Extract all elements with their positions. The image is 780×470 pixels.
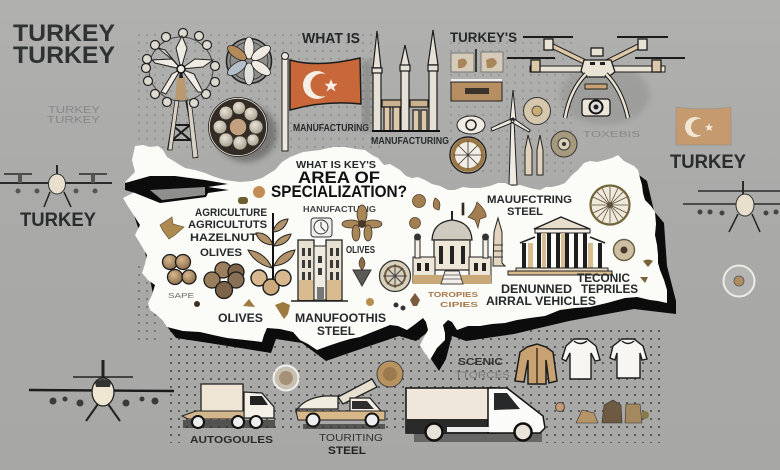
icon: windmill [142, 28, 220, 158]
icon: bowl of eggs [208, 98, 277, 162]
title: Turkey Turkey: TURKEY [13, 20, 115, 47]
text block: brown labels [428, 290, 478, 309]
heading: What is: WHAT IS [302, 31, 360, 47]
icon: large wheel [590, 186, 630, 224]
icon: small market figures [556, 400, 649, 423]
map of Turkey [123, 145, 676, 371]
icon: small Turkish flag [676, 107, 731, 145]
icon: compass wheel [450, 137, 486, 173]
label: manufacturing right: MANUFACTURING [371, 136, 449, 147]
label: olives lower: OLIVES [218, 311, 263, 325]
label: manufacturing steel right: MAUUFCTRING [487, 194, 572, 206]
icon: hazelnut trio left [162, 254, 196, 284]
icon: disc top [524, 98, 550, 124]
text block: agriculture list: OLIVES [200, 247, 242, 259]
icon: Turkish flag on pole [282, 52, 361, 151]
icon: jacket [515, 344, 557, 384]
text block: tectonic textiles vehicles [486, 273, 638, 308]
text block: tectonic textiles vehicles: TEPRILES [581, 284, 638, 296]
faint label: TOXEBIS [583, 130, 640, 139]
icons: small leaves lower [194, 298, 374, 319]
text block: agriculture list: AGRICULTUTS [188, 219, 267, 231]
icon: eye badge [457, 116, 485, 134]
icon: rosette medallion [225, 37, 273, 85]
label: scenic [455, 357, 510, 380]
text block: agriculture list: HAZELNUT [190, 232, 257, 244]
label: manufacturing left: MANUFACTURING [293, 123, 369, 134]
heading: map question [271, 159, 407, 201]
icon: olive plant [248, 213, 295, 295]
icon: tow truck [296, 379, 385, 429]
icon: obelisk [493, 218, 505, 266]
icon: small nut acorn [238, 186, 265, 204]
label: Turkey right: TURKEY [670, 152, 746, 173]
icon: truck one [182, 384, 275, 428]
label: manufacturing small: HANUFACTUING [303, 204, 376, 214]
text block: manufacturing steel: STEEL [317, 324, 355, 338]
icon: clock badge [311, 218, 332, 237]
text block: tectonic textiles vehicles: AIRRAL VEHICLES [486, 296, 596, 308]
icon: leaf top-left [160, 217, 184, 239]
heading: map question: WHAT IS KEY'S [296, 159, 376, 171]
icon: delivery van [406, 388, 545, 442]
label: touriting steel: TOURITING [319, 433, 383, 444]
heading: map question: SPECIALIZATION? [271, 182, 407, 201]
icon: plane bottom left [29, 360, 174, 421]
icon: white shirt right [610, 339, 647, 378]
icon: coin [614, 240, 634, 260]
text block: agriculture list: AGRICULTURE [195, 207, 267, 219]
label: faint scribble: SAPE [168, 293, 194, 300]
heading: Turkey's: TURKEY'S [450, 30, 517, 45]
icon: disc lower [551, 131, 577, 157]
small faded Turkey label: TURKEY [48, 104, 100, 116]
icons: document panels [451, 49, 503, 101]
icon: two bullets [525, 135, 543, 175]
icon: coin right edge [377, 361, 403, 387]
text block: manufacturing steel [295, 311, 386, 338]
icon: target ring [724, 266, 754, 296]
text block: manufacturing steel: MANUFOOTHIS [295, 311, 386, 325]
icon: apartment building [291, 240, 348, 301]
small faded Turkey label [47, 104, 100, 126]
icons: leaves and nuts above mosque [410, 194, 486, 228]
title: Turkey Turkey: TURKEY [13, 42, 115, 69]
label: scenic: TTORCES [455, 370, 510, 380]
text block: agriculture list [188, 207, 267, 259]
icon: mosque [413, 211, 491, 284]
icon: classical temple [508, 217, 612, 275]
icon: plane top left [0, 165, 112, 207]
text block: tectonic textiles vehicles: DENUNNED [501, 284, 572, 296]
icon: flower [342, 205, 382, 241]
icon: wind turbine [491, 90, 530, 185]
icon: mosque minarets [362, 30, 440, 131]
text block: brown labels: TOROPIES [428, 290, 478, 299]
label: manufacturing steel right [487, 194, 572, 218]
title: Turkey Turkey [13, 20, 115, 69]
icon: small bee glyph [640, 260, 653, 283]
icon: drone [507, 37, 685, 125]
heading: map question: AREA OF [298, 168, 380, 187]
icon: spoked wheel small [380, 260, 410, 292]
icon: hazelnut cluster middle [204, 262, 244, 298]
icon: badge lower [274, 366, 298, 390]
icon: acorn sprout [353, 257, 371, 286]
label: manufacturing steel right: STEEL [507, 206, 543, 218]
icon: white shirt left [562, 339, 600, 379]
label: touriting steel [319, 433, 383, 457]
text block: brown labels: CIPIES [440, 300, 478, 309]
small faded Turkey label: TURKEY [47, 114, 100, 126]
label: scenic: SCENIC [458, 357, 503, 368]
icon: plane right [683, 181, 780, 232]
label: Turkey left: TURKEY [20, 210, 96, 231]
icons: small ornaments [394, 293, 420, 310]
text block: tectonic textiles vehicles: TECONIC [577, 273, 630, 285]
label: autogoules: AUTOGOULES [190, 435, 273, 446]
label: touriting steel: STEEL [328, 445, 366, 457]
label: olives right: OLIVES [346, 245, 375, 256]
